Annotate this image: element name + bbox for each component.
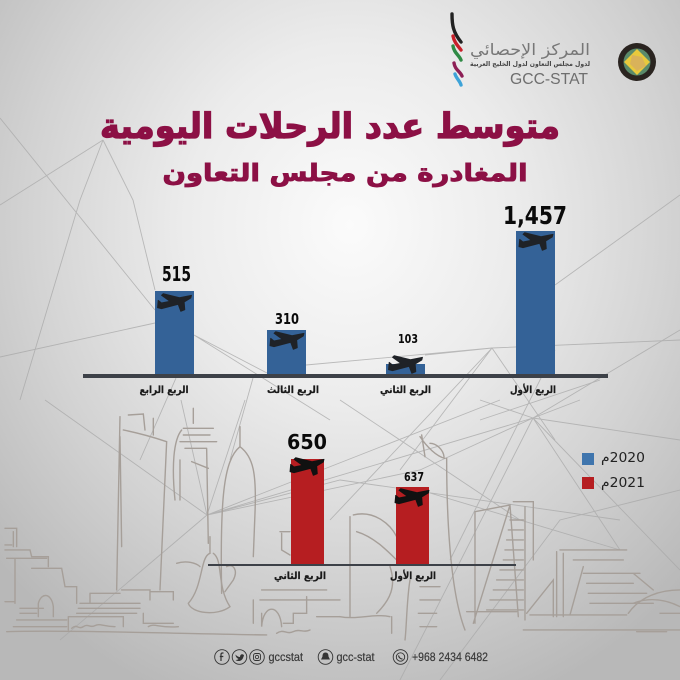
legend — [582, 450, 645, 491]
bar: Q1 2020: 1,457 — [503, 201, 567, 230]
bar: Q2 2020: الربع الثاني — [380, 385, 431, 396]
bar: Q1 2021 — [390, 469, 436, 582]
bar: Q1 2020 — [503, 201, 567, 396]
logo: GCC-STAT — [452, 14, 590, 88]
bar chart: 2020 — [83, 201, 608, 396]
bar: Q2 2020: 103 — [398, 331, 418, 346]
legend: 2021: 2021م — [601, 475, 645, 491]
logo arabic subtitle: لدول مجلس التعاون لدول الخليج العربية — [470, 60, 590, 68]
axis: 2020 — [83, 374, 608, 378]
axis: 2021 — [208, 564, 516, 566]
bar: Q3 2020: الربع الثالث — [267, 385, 319, 396]
bar: Q4 2020: الربع الرابع — [140, 385, 188, 396]
skyline sketch: left — [5, 408, 340, 635]
bar: Q2 2021 — [274, 430, 327, 582]
icon: snapchat — [318, 650, 333, 664]
icon: coloured ribbons — [452, 14, 462, 85]
bar: Q4 2020 — [140, 262, 194, 396]
subtitle: المغادرة من مجلس التعاون — [162, 159, 528, 187]
phone number: +968 2434 6482 — [412, 650, 488, 664]
bar: Q2 2021: 650 — [287, 430, 327, 454]
logo arabic name: المركز الإحصائي — [470, 40, 590, 60]
icon: whatsapp — [393, 650, 408, 664]
bar: Q4 2020: 515 — [162, 262, 191, 286]
bar: Q3 2020 — [267, 310, 319, 396]
footer contacts — [215, 650, 488, 664]
bar chart: 2021 — [208, 430, 516, 582]
bar: Q1 2021: الربع الأول — [390, 569, 436, 582]
title: متوسط عدد الرحلات اليومية — [100, 107, 560, 147]
handle: gccstat: gccstat — [268, 650, 304, 664]
icons: social media — [215, 650, 264, 664]
bar: Q2 2021: الربع الثاني — [274, 571, 326, 582]
bar: Q2 2020 — [380, 331, 431, 396]
legend: 2020: 2020م — [601, 450, 645, 466]
handle: gcc-stat: gcc-stat — [336, 650, 375, 664]
icon: GCC emblem — [618, 43, 656, 81]
bar: Q3 2020: 310 — [275, 310, 299, 328]
skyline sketch: right — [340, 435, 680, 640]
logo latin name: GCC-STAT — [510, 71, 588, 88]
bar: Q1 2021: 637 — [404, 469, 424, 484]
bar: Q1 2020: الربع الأول — [510, 383, 556, 396]
